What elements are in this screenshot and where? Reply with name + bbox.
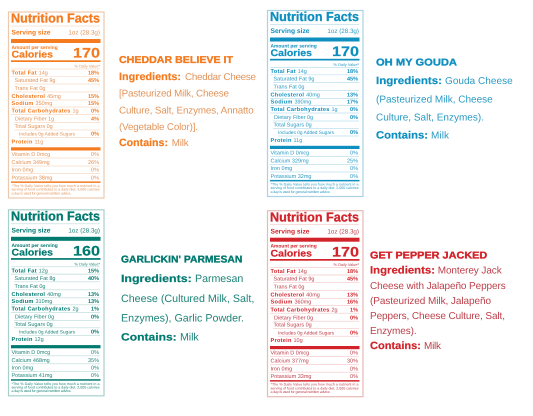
- nutrient table: Total Carbohydrates 2g: [270, 306, 338, 313]
- nutrient table: Dietary Fiber 0g: [274, 115, 313, 121]
- nutrient table: Cholesterol 40mg: [270, 92, 320, 98]
- serving size row: [270, 28, 359, 35]
- nutrient table: 18%: [88, 70, 99, 76]
- ingredients copy: Enzymes).: [370, 326, 417, 337]
- contains line: Contains:: [119, 137, 168, 149]
- vitamins and minerals: Iron 0mg: [12, 366, 33, 372]
- serving size row: 1oz (28.3g): [327, 28, 359, 35]
- daily value note: % Daily Value*: [75, 64, 100, 68]
- footnote: [270, 182, 359, 194]
- calories row: Amount per serving: [12, 45, 58, 51]
- panel: gouda nutrition facts: [268, 9, 363, 197]
- ingredients copy: Parmesan: [195, 273, 243, 285]
- nutrient table: 13%: [88, 292, 99, 298]
- heading: nutrition facts: Nutrition Facts: [11, 11, 100, 26]
- footnote: serving of food contributes to a daily diet. 2,000 calories: [270, 186, 359, 190]
- panel: parmesan nutrition facts: [8, 208, 104, 396]
- vitamins and minerals: 0%: [350, 174, 358, 180]
- calories row: [12, 45, 100, 61]
- daily value note: % Daily Value*: [334, 62, 359, 67]
- contains line: Milk: [424, 341, 442, 352]
- footnote: serving of food contributes to a daily diet. 2,000 calories: [12, 188, 100, 192]
- nutrient table: Cholesterol 40mg: [12, 291, 61, 298]
- heading: cheddar believe it: CHEDDAR BELIEVE IT: [119, 55, 233, 66]
- ingredients copy: Ingredients:: [370, 265, 435, 277]
- nutrient table: Trans Fat 0g: [14, 86, 45, 92]
- calories row: [12, 243, 100, 258]
- vitamins and minerals: [12, 152, 99, 181]
- contains line: Contains:: [370, 340, 421, 352]
- serving size row: [270, 228, 359, 235]
- nutrient table: Protein 10g: [270, 337, 303, 344]
- vitamins and minerals: Calcium 329mg: [270, 158, 309, 164]
- vitamins and minerals: [270, 351, 358, 380]
- nutrient table: Cholesterol 40mg: [270, 292, 320, 299]
- ingredients copy: (Pasteurized Milk, Jalapeño: [370, 296, 491, 307]
- nutrient table: Sodium 310mg: [12, 298, 52, 305]
- calories row: Calories: [12, 50, 53, 61]
- vitamins and minerals: Potassium 33mg: [270, 374, 311, 380]
- vitamins and minerals: 30%: [347, 359, 358, 365]
- nutrient table: Total Sugars 0g: [274, 323, 312, 329]
- heading: nutrition facts: Nutrition Facts: [270, 9, 359, 24]
- nutrient table: 0%: [91, 132, 99, 138]
- nutrient table: 15%: [88, 268, 99, 274]
- vitamins and minerals: 0%: [91, 373, 99, 379]
- nutrient table: Includes 0g Added Sugars: [278, 130, 335, 136]
- nutrient table: 0%: [350, 130, 358, 136]
- nutrient table: Protein 12g: [12, 336, 44, 343]
- panel: cheddar nutrition facts: [8, 11, 104, 198]
- nutrient table: Total Sugars 0g: [274, 122, 312, 128]
- ingredients copy: [370, 265, 506, 337]
- nutrient table: Dietary Fiber 1g: [15, 117, 54, 123]
- nutrient table: 18%: [347, 69, 358, 75]
- contains line: Milk: [172, 138, 189, 149]
- nutrient table: 45%: [347, 277, 358, 283]
- calories row: 170: [332, 44, 359, 59]
- heading: get pepper jacked: GET PEPPER JACKED: [370, 251, 487, 262]
- nutrient table: Protein 11g: [12, 138, 43, 145]
- nutrient table: 45%: [88, 78, 99, 84]
- vitamins and minerals: 0%: [350, 166, 358, 172]
- nutrient table: Saturated Fat 9g: [274, 76, 314, 82]
- nutrient table: 13%: [347, 293, 358, 299]
- nutrient table: 0%: [350, 107, 358, 113]
- vitamins and minerals: 0%: [91, 350, 99, 356]
- serving size row: Serving size: [270, 28, 310, 35]
- serving size row: 1oz (28.3g): [327, 228, 359, 235]
- contains line: [376, 130, 450, 142]
- text block: cheddar ingredients: [119, 55, 257, 149]
- nutrient table: Cholesterol 45mg: [12, 93, 61, 100]
- footnote: serving of food contributes to a daily diet. 2,000 calories: [12, 385, 100, 389]
- calories row: Calories: [270, 48, 312, 59]
- nutrient table: 1%: [91, 306, 99, 312]
- vitamins and minerals: Iron 0mg: [12, 168, 33, 174]
- footnote: *The % Daily Value tells you how much a nutrient in a: [270, 182, 358, 186]
- daily value note: % Daily Value*: [75, 261, 100, 266]
- calories row: 170: [332, 244, 359, 259]
- heading: garlickin' parmesan: GARLICKIN' PARMESAN: [121, 255, 242, 266]
- nutrient table: 0%: [350, 330, 358, 336]
- nutrient table: 0%: [350, 115, 358, 121]
- footnote: [12, 184, 100, 195]
- vitamins and minerals: Potassium 32mg: [270, 174, 311, 180]
- vitamins and minerals: 0%: [91, 366, 99, 372]
- nutrient table: Dietary Fiber 0g: [274, 315, 313, 321]
- vitamins and minerals: Calcium 349mg: [12, 160, 50, 166]
- vitamins and minerals: Vitamin D 0mcg: [12, 350, 50, 356]
- footnote: *The % Daily Value tells you how much a nutrient in a: [270, 383, 358, 387]
- contains line: Contains:: [376, 130, 428, 142]
- contains line: Milk: [180, 332, 199, 344]
- footnote: a day is used for general nutrition advice.: [12, 389, 72, 393]
- vitamins and minerals: 0%: [350, 150, 358, 156]
- nutrient table: Sodium 350mg: [12, 100, 52, 107]
- nutrient table: 4%: [91, 117, 99, 123]
- nutrient table: Protein 11g: [270, 137, 302, 144]
- serving size row: 1oz (28.3g): [68, 228, 100, 235]
- nutrient table: 13%: [88, 299, 99, 305]
- nutrient table: 0%: [350, 315, 358, 321]
- serving size row: 1oz (28.3g): [68, 30, 100, 37]
- serving size row: Serving size: [270, 228, 310, 235]
- nutrient table: Saturated Fat 8g: [14, 276, 55, 282]
- nutrient table: Includes 0g Added Sugars: [19, 330, 76, 336]
- vitamins and minerals: Iron 0mg: [270, 166, 292, 172]
- nutrient table: 15%: [88, 101, 99, 107]
- vitamins and minerals: 0%: [91, 152, 99, 158]
- vitamins and minerals: 0%: [91, 175, 99, 181]
- vitamins and minerals: 0%: [350, 351, 358, 357]
- ingredients copy: Ingredients:: [121, 273, 192, 285]
- ingredients copy: [Pasteurized Milk, Cheese: [119, 89, 230, 100]
- nutrient table: Trans Fat 0g: [274, 84, 304, 90]
- contains line: [119, 137, 189, 149]
- nutrient table: Includes 0g Added Sugars: [19, 132, 76, 138]
- nutrient table: Total Sugars 0g: [14, 322, 53, 328]
- contains line: [370, 340, 442, 352]
- nutrient table: 1%: [350, 307, 358, 313]
- nutrient table: Total Carbohydrates 2g: [12, 306, 79, 312]
- text block: pepper jack ingredients: [370, 251, 506, 352]
- nutrient table: 17%: [347, 100, 358, 106]
- footnote: a day is used for general nutrition advice.: [12, 191, 72, 195]
- nutrient table: 40%: [88, 276, 99, 282]
- contains line: Milk: [431, 131, 450, 142]
- vitamins and minerals: Potassium 41mg: [12, 373, 52, 379]
- nutrient table: [270, 68, 358, 144]
- serving size row: [12, 228, 100, 234]
- vitamins and minerals: 0%: [350, 374, 358, 380]
- calories row: [270, 44, 359, 59]
- ingredients copy: (Vegetable Color)].: [119, 122, 198, 133]
- ingredients copy: [121, 273, 254, 325]
- nutrient table: Total Carbohydrates 1g: [12, 108, 79, 115]
- calories row: Calories: [270, 248, 312, 259]
- vitamins and minerals: 35%: [88, 358, 99, 364]
- footnote: *The % Daily Value tells you how much a nutrient in a: [12, 382, 100, 386]
- nutrient table: Sodium 360mg: [270, 299, 311, 306]
- nutrient table: 0%: [91, 330, 99, 336]
- nutrient table: Saturated Fat 9g: [274, 277, 314, 283]
- footnote: a day is used for general nutrition advice.: [270, 390, 330, 394]
- nutrient table: [12, 70, 99, 145]
- heading: nutrition facts: Nutrition Facts: [270, 209, 359, 224]
- calories row: Amount per serving: [270, 44, 317, 50]
- ingredients copy: Culture, Salt, Enzymes).: [376, 113, 484, 124]
- ingredients copy: [376, 75, 513, 124]
- vitamins and minerals: 0%: [350, 366, 358, 372]
- vitamins and minerals: Calcium 468mg: [12, 358, 50, 364]
- ingredients copy: Ingredients:: [376, 75, 442, 87]
- calories row: Amount per serving: [12, 243, 58, 249]
- nutrient table: 0%: [91, 314, 99, 320]
- footnote: [12, 382, 100, 393]
- nutrient table: 18%: [347, 269, 358, 275]
- nutrient table: 45%: [347, 76, 358, 82]
- serving size row: Serving size: [12, 228, 51, 235]
- vitamins and minerals: 25%: [347, 158, 358, 164]
- heading: oh my gouda: OH MY GOUDA: [376, 58, 457, 69]
- nutrient table: Trans Fat 0g: [14, 284, 45, 290]
- text block: gouda ingredients: [376, 58, 513, 142]
- nutrient table: 16%: [347, 300, 358, 306]
- calories row: [270, 244, 359, 259]
- nutrient table: Total Fat 14g: [12, 70, 48, 76]
- vitamins and minerals: Calcium 377mg: [270, 359, 309, 365]
- calories row: Amount per serving: [270, 244, 317, 250]
- nutrient table: Total Fat 14g: [270, 68, 307, 75]
- panel: pepper jack nutrition facts: [268, 209, 363, 397]
- ingredients copy: [119, 71, 257, 133]
- vitamins and minerals: 26%: [88, 160, 99, 166]
- ingredients copy: Gouda Cheese: [445, 76, 513, 87]
- vitamins and minerals: Vitamin D 0mcg: [270, 150, 309, 156]
- ingredients copy: (Pasteurized Milk, Cheese: [376, 94, 493, 105]
- ingredients copy: Culture, Salt, Enzymes, Annatto: [119, 105, 254, 116]
- nutrient table: [270, 268, 358, 344]
- ingredients copy: Cheese (Cultured Milk, Salt,: [121, 293, 254, 305]
- contains line: Contains:: [121, 332, 177, 344]
- vitamins and minerals: Iron 0mg: [270, 366, 292, 372]
- nutrient table: 15%: [88, 94, 99, 100]
- ingredients copy: Cheese with Jalapeño Peppers: [370, 281, 506, 292]
- footnote: a day is used for general nutrition advice.: [270, 190, 330, 194]
- nutrient table: Saturated Fat 9g: [14, 78, 55, 84]
- daily value note: % Daily Value*: [334, 262, 359, 267]
- serving size row: Serving size: [12, 30, 51, 37]
- ingredients copy: Ingredients:: [119, 71, 181, 83]
- nutrient table: [12, 267, 99, 343]
- serving size row: [12, 30, 100, 37]
- footnote: serving of food contributes to a daily diet. 2,000 calories: [270, 386, 359, 390]
- contains line: [121, 332, 199, 344]
- ingredients copy: Peppers, Cheese Culture, Salt,: [370, 311, 505, 322]
- vitamins and minerals: Potassium 38mg: [12, 175, 52, 181]
- calories row: Calories: [12, 248, 53, 259]
- ingredients copy: Monterey Jack: [438, 266, 503, 277]
- ingredients copy: Enzymes), Garlic Powder.: [121, 313, 244, 325]
- calories row: 170: [73, 46, 100, 61]
- vitamins and minerals: Vitamin D 0mcg: [270, 351, 309, 357]
- nutrient table: Sodium 390mg: [270, 98, 311, 106]
- nutrient table: Trans Fat 0g: [274, 285, 304, 291]
- nutrient table: Dietary Fiber 0g: [15, 314, 54, 320]
- footnote: *The % Daily Value tells you how much a nutrient in a: [12, 184, 100, 188]
- vitamins and minerals: [12, 350, 99, 379]
- nutrient table: 0%: [91, 109, 99, 115]
- calories row: 160: [73, 244, 100, 259]
- ingredients copy: Cheddar Cheese: [185, 72, 257, 83]
- nutrient table: 13%: [347, 92, 358, 98]
- vitamins and minerals: Vitamin D 0mcg: [12, 152, 50, 158]
- nutrient table: Total Fat 14g: [270, 268, 307, 275]
- vitamins and minerals: 0%: [91, 168, 99, 174]
- nutrient table: Total Sugars 0g: [14, 124, 53, 130]
- vitamins and minerals: [270, 150, 358, 180]
- footnote: [270, 383, 359, 394]
- heading: nutrition facts: Nutrition Facts: [11, 209, 100, 224]
- nutrient table: Total Fat 12g: [12, 267, 48, 274]
- text block: parmesan ingredients: [121, 255, 254, 344]
- nutrient table: Includes 0g Added Sugars: [278, 330, 335, 336]
- nutrient table: Total Carbohydrates 1g: [270, 106, 338, 113]
